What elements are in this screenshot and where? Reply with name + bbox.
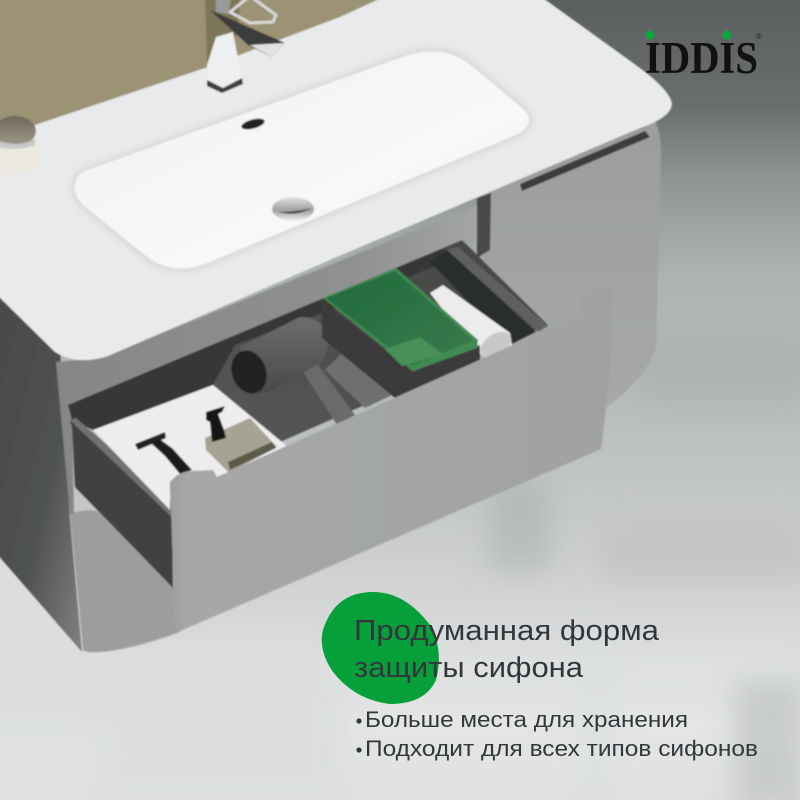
drawer back wall — [68, 248, 445, 430]
chrome faucet — [205, 0, 285, 93]
open drawer — [68, 240, 548, 588]
door gap — [477, 193, 491, 258]
basin soft shading — [70, 47, 533, 272]
drawer front panel with cut-out grip — [170, 284, 613, 632]
counter top — [0, 0, 672, 360]
white counter with basin — [0, 0, 672, 360]
olive wall behind the basin — [0, 0, 410, 143]
cabinet rail beneath the counter — [56, 205, 478, 515]
left drawer side wall — [70, 420, 173, 588]
rail on drawer floor — [325, 350, 392, 408]
heading — [354, 615, 660, 684]
door handle recess — [520, 131, 650, 191]
heading: Продуманная форма — [354, 615, 660, 647]
cream jar — [0, 116, 40, 175]
rolled white towel — [430, 285, 516, 364]
soap dispenser bottle — [205, 406, 277, 473]
lower closed drawer — [70, 510, 180, 652]
drawer floor — [68, 240, 548, 490]
chrome drain — [272, 197, 314, 221]
drawer far right wall — [447, 247, 548, 332]
green storage tray — [322, 268, 480, 398]
bullet list: Подходит для всех типов сифонов — [365, 736, 758, 761]
IDDIS logo: ® — [756, 32, 762, 41]
green accent blob — [322, 592, 439, 704]
razor — [135, 432, 192, 474]
logo green dots — [646, 30, 732, 40]
cabinet body, left side — [0, 275, 82, 652]
overflow hole — [240, 117, 266, 131]
basin — [74, 51, 529, 269]
vanity photo illustration — [0, 0, 672, 652]
bullet list — [356, 707, 758, 761]
white towel — [93, 385, 288, 510]
bullet list: Больше места для хранения — [365, 707, 688, 732]
IDDIS logo: IDDIS — [645, 33, 758, 83]
heading: защиты сифона — [354, 652, 584, 684]
cabinet right door — [480, 120, 661, 460]
hair dryer — [226, 317, 355, 425]
